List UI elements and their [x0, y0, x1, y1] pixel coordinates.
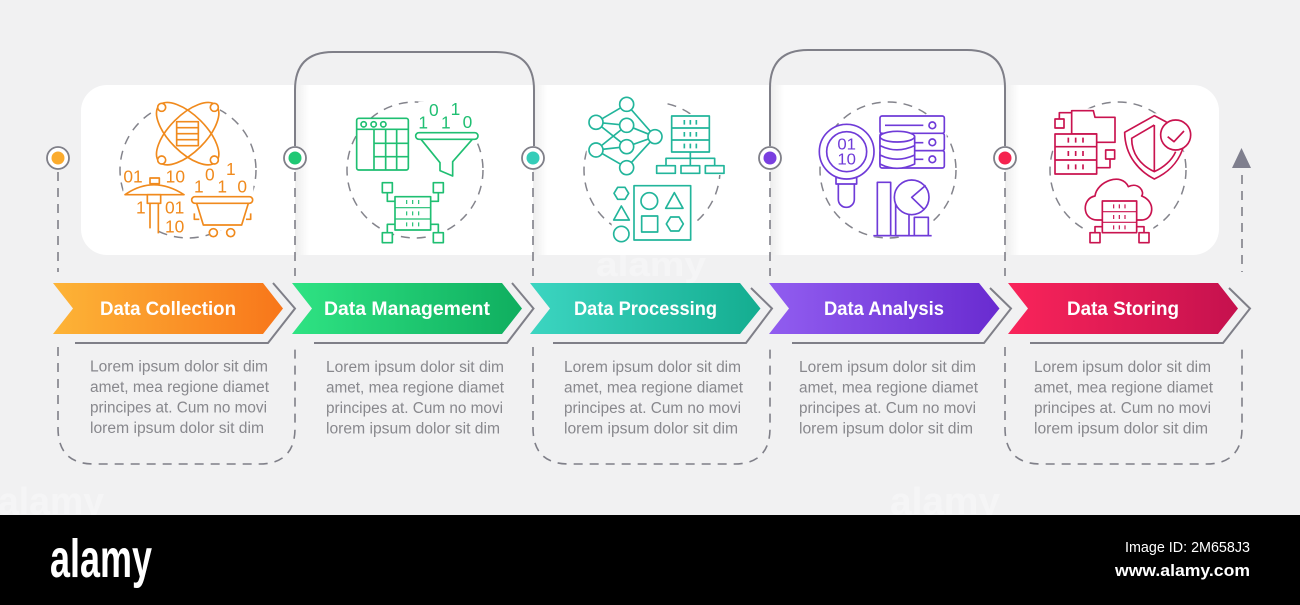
connector lines [58, 50, 1242, 464]
step 2: description: principes at. Cum no movi [326, 400, 503, 417]
step 3: data processing arrow: Data Processing [574, 299, 717, 320]
icon: data management: 1 [418, 112, 428, 132]
icon: data collection: 0 [205, 165, 215, 185]
step 3: description [564, 359, 744, 438]
step 4: description: amet, mea regione diamet [799, 380, 979, 396]
step 4: data analysis arrow: Data Analysis [824, 299, 944, 320]
step 4: description: lorem ipsum dolor sit dim [799, 420, 973, 438]
step 5: description [1034, 359, 1214, 438]
dashed icon circles [120, 102, 1186, 238]
step 4: description: Lorem ipsum dolor sit dim [799, 359, 976, 376]
icon: data collection: 1 [194, 177, 204, 197]
icon: data analysis [819, 115, 947, 237]
watermarks: alamy [596, 246, 706, 284]
icon: data management: 1 [451, 99, 460, 119]
icon: data collection [123, 92, 253, 237]
icon: data collection: 1 [136, 197, 146, 217]
step 2: description: amet, mea regione diamet [326, 380, 505, 396]
step 3: description: Lorem ipsum dolor sit dim [564, 359, 741, 376]
step 1: data collection arrow [53, 283, 295, 343]
footer band: Image ID: 2M658J3 [1125, 539, 1250, 556]
step 2: description: lorem ipsum dolor sit dim [326, 420, 500, 438]
step 3: description: principes at. Cum no movi [564, 400, 741, 417]
icon: data storing [1053, 108, 1191, 243]
step 4: description: principes at. Cum no movi [799, 400, 976, 417]
step 1: description: Lorem ipsum dolor sit dim [90, 358, 268, 376]
watermarks [0, 246, 1000, 523]
node: step 2 [284, 147, 306, 169]
icon: data collection: 10 [165, 216, 184, 236]
icon: data collection: 01 [123, 166, 143, 186]
step 5: description: lorem ipsum dolor sit dim [1034, 420, 1208, 438]
step 1: data collection arrow: Data Collection [100, 299, 236, 320]
step 5: data storing arrow [1008, 283, 1250, 343]
icon: data processing [587, 95, 726, 242]
icon: data analysis: 10 [837, 152, 856, 169]
icon: data management: 0 [463, 112, 472, 132]
watermarks: alamy [890, 481, 1000, 523]
step 5: description: amet, mea regione diamet [1034, 380, 1214, 396]
icon: data analysis: 01 [837, 136, 856, 153]
step 4: data analysis arrow [769, 283, 1011, 343]
footer band: alamy [50, 529, 152, 589]
icon: data management: 1 [441, 112, 451, 132]
step 1: description: principes at. Cum no movi [90, 400, 267, 416]
icon: data management [357, 99, 478, 243]
step 4: description [799, 359, 979, 438]
icon: data collection: 10 [166, 166, 185, 186]
step 2: data management arrow: Data Management [324, 299, 491, 320]
step 3: description: lorem ipsum dolor sit dim [564, 420, 738, 438]
footer band: www.alamy.com [1114, 561, 1250, 580]
node: step 4 [759, 147, 781, 169]
node: step 3 [522, 147, 544, 169]
step 3: description: amet, mea regione diamet [564, 380, 744, 396]
step 3: data processing arrow [530, 283, 772, 343]
step 1: description: amet, mea regione diamet [90, 379, 270, 396]
icon: data collection: 1 [226, 159, 236, 179]
white icon card [81, 85, 1219, 255]
step 1: description [90, 358, 270, 437]
node: step 1 [47, 147, 69, 169]
step 2: description: Lorem ipsum dolor sit dim [326, 359, 504, 376]
icon: data collection: 0 [237, 177, 247, 197]
step 5: description: Lorem ipsum dolor sit dim [1034, 359, 1211, 376]
step 2: description [326, 359, 505, 438]
icon: data management: 0 [429, 100, 439, 120]
node: step 5 [994, 147, 1016, 169]
step 2: data management arrow [292, 283, 534, 343]
footer band [0, 515, 1300, 605]
icon: data collection: 1 [217, 177, 227, 197]
step 1: description: lorem ipsum dolor sit dim [90, 420, 264, 437]
step 5: data storing arrow: Data Storing [1067, 299, 1179, 320]
icon: data collection: 01 [165, 197, 184, 217]
step 5: description: principes at. Cum no movi [1034, 400, 1211, 417]
arrow head: end of flow [1232, 148, 1251, 168]
watermarks: alamy [0, 481, 104, 523]
